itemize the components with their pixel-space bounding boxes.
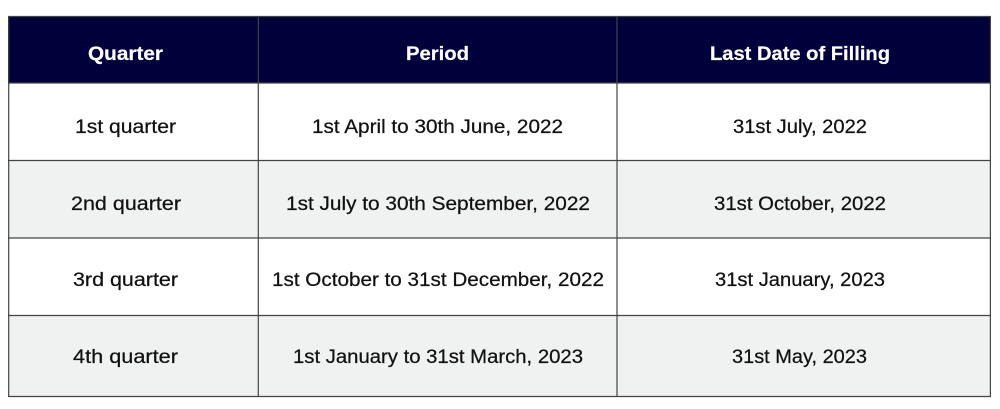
row: 2nd quarter: 2nd quarter [71,194,182,215]
row: 4th quarter: 31st May, 2023 [732,347,867,368]
row: 1st quarter: 31st July, 2022 [733,117,867,138]
header: Last Date of Filling: Last Date of Filling [710,44,890,65]
row: 2nd quarter: 1st July to 30th September, 2022 [286,194,590,215]
row: 3rd quarter: 31st January, 2023 [715,270,885,291]
row: 3rd quarter: 3rd quarter [73,270,179,291]
row: 1st quarter [8,83,991,160]
header: Quarter: Quarter [88,44,164,65]
row: 4th quarter: 1st January to 31st March, 2023 [293,347,583,368]
row: 3rd quarter [8,238,991,315]
row: 1st quarter: 1st quarter [75,117,177,138]
row: 2nd quarter [8,160,991,238]
row: 4th quarter [8,315,991,396]
row: 3rd quarter: 1st October to 31st December, 2022 [272,270,604,291]
row: 2nd quarter: 31st October, 2022 [714,194,886,215]
header: Period: Period [406,44,469,65]
row: 4th quarter: 4th quarter [73,347,179,368]
header row [8,16,991,83]
row: 1st quarter: 1st April to 30th June, 2022 [312,117,563,138]
